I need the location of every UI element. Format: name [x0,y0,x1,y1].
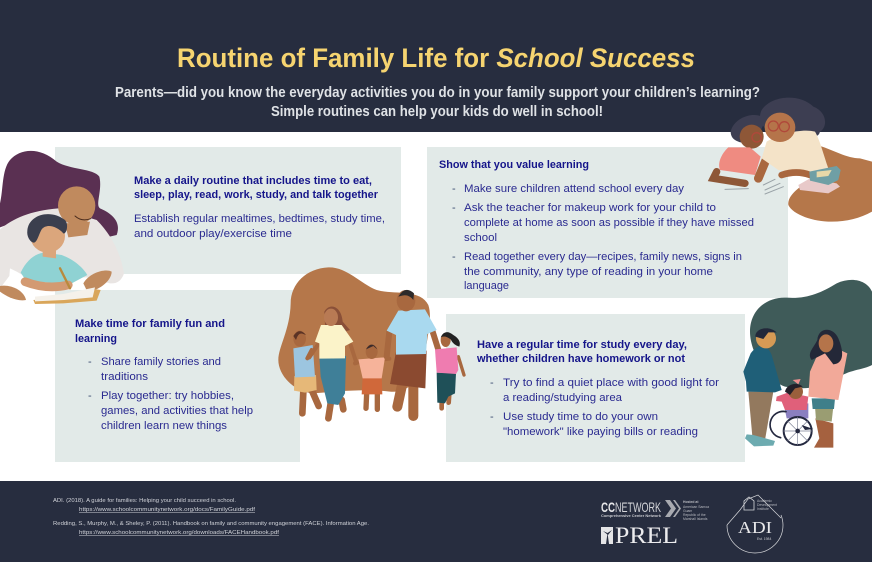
figure: boy [293,331,319,413]
panel: study time: whether children have homework or not [476,353,685,365]
panel: family fun: children learn new things [101,420,228,432]
panel: value learning: - [452,251,456,263]
panel: daily routine: Establish regular mealtimes, bedtimes, study time, [134,213,385,225]
panel: study time [446,314,745,462]
panel: value learning: language [464,280,509,292]
logo: CC Network: Hosted at [683,500,699,504]
logo: ADI: Development [757,503,777,507]
illustration: family with wheelchair [743,280,872,448]
panel: study time: "homework" like paying bills or reading [503,426,698,438]
logo: ADI: ADI [738,518,772,537]
references: Redding, S., Murphy, M., & Sheley, P. (2011). Handbook on family and community engagement (FACE). Information Age. [53,521,369,527]
figure: younger child [713,115,765,183]
illustration: children studying [713,98,872,222]
logo: ADI [727,495,783,553]
logo: CC Network [601,499,709,521]
panel: family fun: Share family stories and [101,356,221,368]
illustration: family walking [278,267,464,418]
figure: mother [309,306,356,418]
figure: woman in pink [808,330,847,448]
panel: value learning: school [464,232,497,244]
panel: value learning: Ask the teacher for makeup work for your child to [464,202,716,214]
references: https://www.schoolcommunitynetwork.org/docs/FamilyGuide.pdf [79,507,256,513]
panel: family fun: traditions [101,371,149,383]
references: https://www.schoolcommunitynetwork.org/downloads/FACEHandbook.pdf [79,530,280,536]
panel: daily routine: and outdoor play/exercise time [134,228,292,240]
subtitle [115,85,760,120]
subtitle: Simple routines can help your kids do well in school! [271,104,603,120]
panel: value learning: - [452,202,456,214]
panel: value learning: - [452,183,456,195]
panel: value learning: Make sure children attend school every day [464,183,685,195]
header band [0,0,872,132]
panel: value learning: Read together every day—recipes, family news, signs in [464,251,742,263]
panel: family fun: - [88,390,92,402]
panel: value learning [427,147,788,298]
panel: study time: Have a regular time for study every day, [477,339,687,351]
panel: family fun: - [88,356,92,368]
panel: family fun: Play together: try hobbies, [101,390,234,402]
subtitle: Parents—did you know the everyday activities you do in your family support your children’s learning? [115,85,760,101]
icon: books [798,166,841,193]
logo: CC Network: CC [601,499,615,515]
panel: value learning: complete at home as soon as possible if they have missed [464,217,754,229]
panel: study time: - [490,411,494,423]
title: Routine of Family Life for School Success [177,43,695,73]
panel: value learning: the community, any type of reading in your home [464,266,713,278]
references: ADI. (2018). A guide for families: Helping your child succeed in school. [53,498,236,504]
logo: ADI: Institute [757,507,769,511]
logo: CC Network: Marshall Islands [683,517,708,521]
panel: study time: - [490,377,494,389]
figure: father [387,290,440,416]
panel: family fun [55,290,300,462]
logo: ADI: Academic [757,499,772,503]
figure: older child [758,98,828,178]
figure: toddler [355,344,389,409]
panel: daily routine: Make a daily routine that includes time to eat, [134,175,372,187]
footer band [0,481,872,562]
logo: CC Network: Comprehensive Center Network [601,514,661,518]
logo: PREL: PREL [615,523,678,548]
references [53,498,369,536]
figure: girl [435,332,464,408]
panel: daily routine: sleep, play, read, work, study, and talk together [134,189,379,201]
logo: ADI: Est. 1984 [757,537,771,541]
logo: CC Network: Guam [683,509,692,513]
panel: value learning: Show that you value learning [439,159,589,171]
panel: study time: a reading/studying area [503,392,623,404]
figure: child in wheelchair [770,379,813,445]
panel: study time: Try to find a quiet place with good light for [503,377,719,389]
panel: family fun: learning [75,333,117,345]
panel: daily routine [55,147,401,274]
logo: CC Network: Republic of the [683,513,706,517]
logo: CC Network: NETWORK [615,499,661,515]
panel: family fun: Make time for family fun and [75,318,225,330]
icon: paper scribbles [725,179,783,194]
figure: man in blue [743,328,782,446]
panel: study time: Use study time to do your own [503,411,658,423]
illustration: father and son reading [0,151,124,304]
panel: family fun: games, and activities that help [101,405,253,417]
logo: CC Network: American Samoa [683,505,709,509]
